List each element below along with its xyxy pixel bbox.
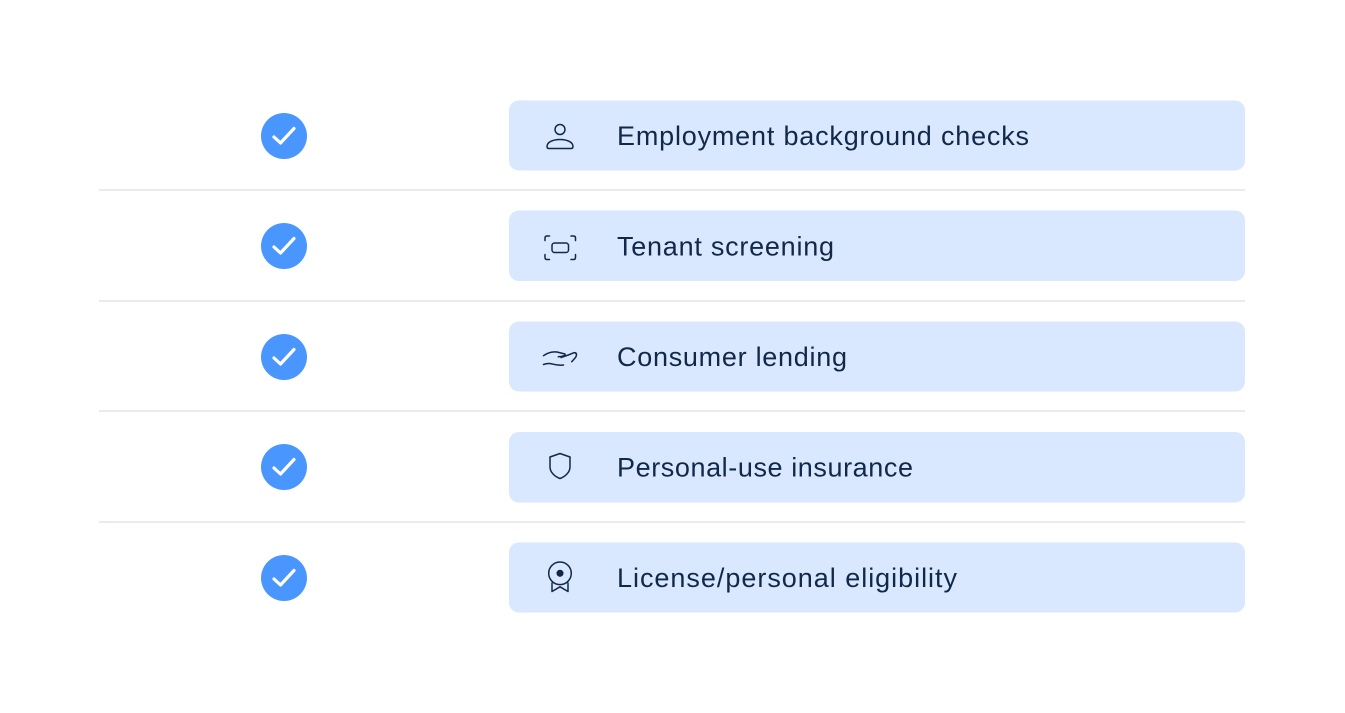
icon: check badge xyxy=(261,113,307,159)
panel: license label xyxy=(509,542,1245,612)
icon: award ribbon xyxy=(549,562,571,592)
panel: consumer label xyxy=(509,322,1245,392)
row: license/personal eligibility xyxy=(261,542,1245,612)
text: employment background checks: Employment background checks xyxy=(617,121,1029,151)
icon: check badge xyxy=(261,444,307,490)
panel: insurance label xyxy=(509,432,1245,502)
icon: check badge xyxy=(261,223,307,269)
icon: check badge xyxy=(261,334,307,380)
row: tenant screening xyxy=(261,210,1245,281)
icon: check badge xyxy=(261,555,307,601)
row: personal-use insurance xyxy=(261,432,1245,502)
text: personal-use insurance: Personal-use insurance xyxy=(617,452,913,482)
row: consumer lending xyxy=(261,322,1245,392)
icon: shield xyxy=(550,454,570,478)
panel: employment label xyxy=(509,100,1245,170)
icon: person xyxy=(547,124,573,148)
text: consumer lending: Consumer lending xyxy=(617,342,847,372)
text: license/personal eligibility: License/personal eligibility xyxy=(617,563,958,593)
icon: open hand xyxy=(544,352,576,365)
row: employment background checks xyxy=(261,100,1245,170)
text: tenant screening: Tenant screening xyxy=(617,232,834,262)
icon: scan frame xyxy=(545,236,576,260)
panel: tenant label xyxy=(509,210,1245,281)
